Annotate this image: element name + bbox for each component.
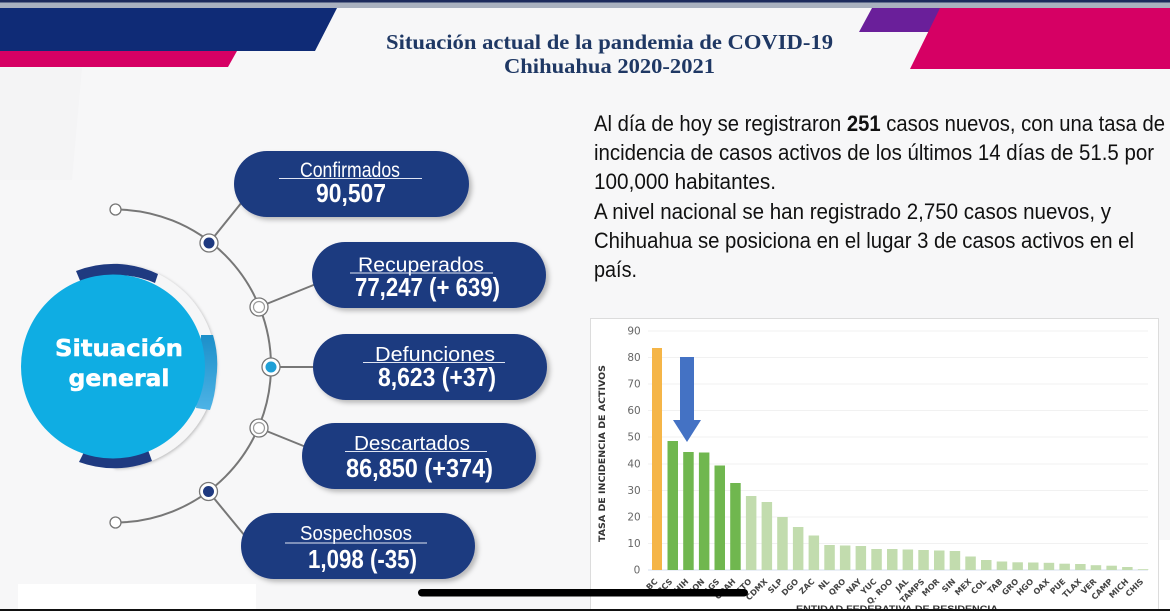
x axis labels: COL — [969, 577, 988, 596]
x axis labels: Q. ROO — [865, 577, 895, 606]
x axis labels: YUC — [858, 577, 878, 597]
y axis labels — [627, 326, 641, 576]
pill: sospechosos: 1,098 (-35) — [308, 546, 417, 574]
y axis labels: 20 — [627, 512, 641, 524]
pill: recuperados: Recuperados — [358, 254, 484, 276]
node: confirmados — [200, 234, 218, 252]
x axis labels: PUE — [1048, 577, 1067, 596]
node: descartados — [250, 419, 268, 437]
x axis labels: CHIH — [668, 577, 690, 599]
header shapes right — [859, 8, 1170, 69]
x axis labels: MICH — [1107, 577, 1130, 600]
y axis labels: 90 — [627, 326, 641, 338]
pill: sospechosos: Sospechosos — [300, 523, 412, 545]
node: left end bottom — [110, 517, 121, 528]
home indicator bar — [418, 589, 748, 596]
white patch bottom left — [18, 584, 256, 609]
x axis labels: NAY — [844, 577, 864, 596]
pill: defunciones: Defunciones — [375, 344, 495, 366]
summary text block: país. — [594, 257, 637, 282]
x axis labels: BC — [645, 577, 660, 592]
x axis labels: QRO — [827, 577, 848, 597]
bottom rule — [0, 609, 1170, 611]
title — [386, 30, 833, 78]
white strip right of chart — [1158, 540, 1170, 609]
x axis labels: ZAC — [797, 577, 816, 596]
x axis labels: DGO — [780, 577, 801, 598]
y axis labels: 50 — [627, 432, 641, 444]
summary text block: 100,000 habitantes. — [594, 169, 776, 194]
x axis labels: CDMX — [744, 576, 770, 602]
y axis title: TASA DE INCIDENCIA DE ACTIVOS — [598, 365, 608, 542]
summary text block — [594, 111, 1165, 282]
x axis labels: JAL — [893, 577, 910, 594]
x axis labels: GRO — [1000, 577, 1021, 597]
x axis labels: VER — [1079, 577, 1098, 596]
x axis labels: MOR — [920, 577, 941, 598]
x axis labels: SON — [686, 577, 706, 597]
x axis labels: TLAX — [1061, 576, 1084, 600]
x axis labels: HGO — [1015, 577, 1036, 598]
y axis labels: 30 — [627, 485, 641, 497]
top border band — [0, 0, 1170, 8]
x axis labels: BCS — [655, 577, 675, 596]
node: left end top — [110, 204, 121, 215]
pill: defunciones — [313, 334, 547, 400]
y axis labels: 0 — [634, 564, 640, 576]
x axis labels: TAMPS — [898, 577, 927, 605]
node: sospechosos — [200, 482, 218, 500]
central circle: situación general: Situación — [55, 336, 183, 362]
y axis labels: 40 — [627, 458, 641, 470]
pill: confirmados: Confirmados — [300, 159, 400, 182]
x axis labels: SLP — [766, 577, 785, 595]
x axis labels: CHIS — [1124, 577, 1146, 598]
pill: descartados — [302, 423, 536, 489]
x axis labels: OAX — [1032, 576, 1052, 597]
arrow: marks Chihuahua — [673, 357, 701, 442]
pill: confirmados: 90,507 — [316, 180, 386, 208]
pill: sospechosos — [241, 513, 475, 579]
connector network — [115, 202, 316, 536]
x axis labels: GTO — [734, 577, 754, 597]
pill: descartados: Descartados — [354, 433, 470, 455]
y axis labels: 80 — [627, 352, 641, 364]
node: defunciones — [262, 358, 280, 376]
x axis labels: TAB — [986, 577, 1004, 596]
header shapes left — [0, 8, 337, 67]
x axis labels: CAMP — [1090, 577, 1115, 602]
x axis labels: AGS — [702, 577, 722, 597]
node: recuperados — [250, 298, 268, 316]
central circle: situación general: general — [68, 366, 170, 392]
summary text block: A nivel nacional se han registrado 2,750 casos nuevos, y — [594, 199, 1112, 224]
central circle: situación general — [21, 264, 217, 468]
y axis labels: 70 — [627, 378, 641, 390]
x axis labels: NL — [817, 577, 831, 592]
pill: confirmados — [234, 151, 469, 217]
pill: descartados: 86,850 (+374) — [346, 455, 493, 483]
x axis labels: MEX — [953, 576, 974, 597]
x axis labels: SIN — [940, 577, 957, 594]
panel: bar chart — [590, 318, 1158, 611]
x axis labels — [645, 576, 1146, 606]
bars — [652, 348, 1148, 570]
title: Chihuahua 2020-2021 — [504, 54, 715, 78]
y axis labels: 10 — [627, 538, 641, 550]
x axis labels: COAH — [713, 577, 737, 601]
y axis labels: 60 — [627, 405, 641, 417]
pill: defunciones: 8,623 (+37) — [378, 364, 496, 392]
pill: recuperados: 77,247 (+ 639) — [355, 274, 500, 302]
pill: recuperados — [312, 242, 546, 308]
title: Situación actual de la pandemia de COVID-19 — [386, 30, 833, 54]
